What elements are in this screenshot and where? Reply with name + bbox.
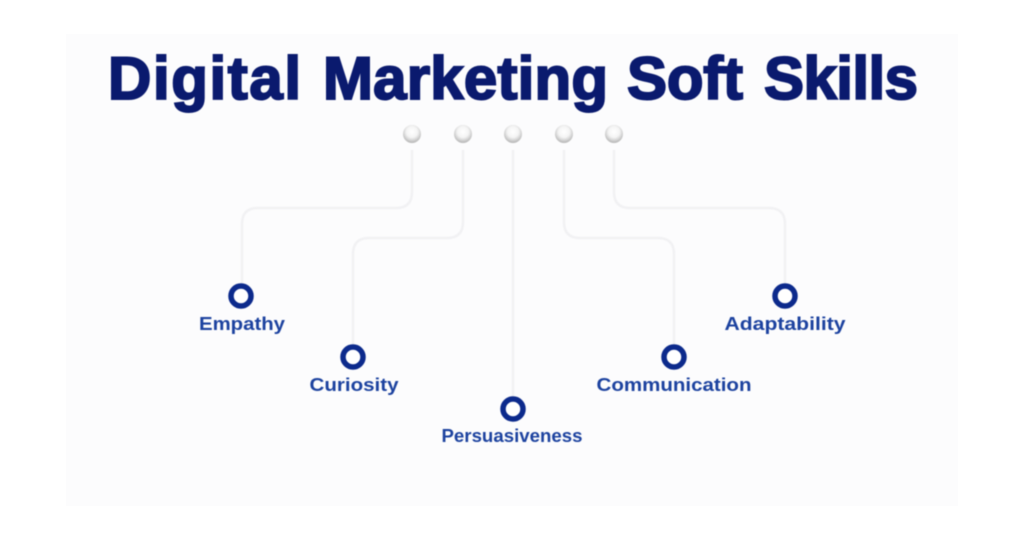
skill: Adaptability xyxy=(724,286,846,334)
title: Marketing xyxy=(323,45,608,112)
skill: Persuasiveness: Persuasiveness xyxy=(442,426,582,446)
title: Soft xyxy=(627,45,743,112)
connector lines xyxy=(242,150,785,397)
skill: Curiosity xyxy=(310,347,398,395)
title: Digital xyxy=(108,45,301,112)
top connector dots xyxy=(403,125,623,143)
skill: Communication: Communication xyxy=(596,375,752,395)
skill: Empathy: Empathy xyxy=(199,314,285,334)
skill: Curiosity: Curiosity xyxy=(310,375,398,395)
background panel xyxy=(66,34,958,506)
title: Skills xyxy=(764,45,918,112)
skill: Persuasiveness xyxy=(442,399,582,446)
title xyxy=(108,45,918,112)
skill: Adaptability: Adaptability xyxy=(724,314,846,334)
skill: Empathy xyxy=(199,286,285,334)
skill: Communication xyxy=(596,347,752,395)
